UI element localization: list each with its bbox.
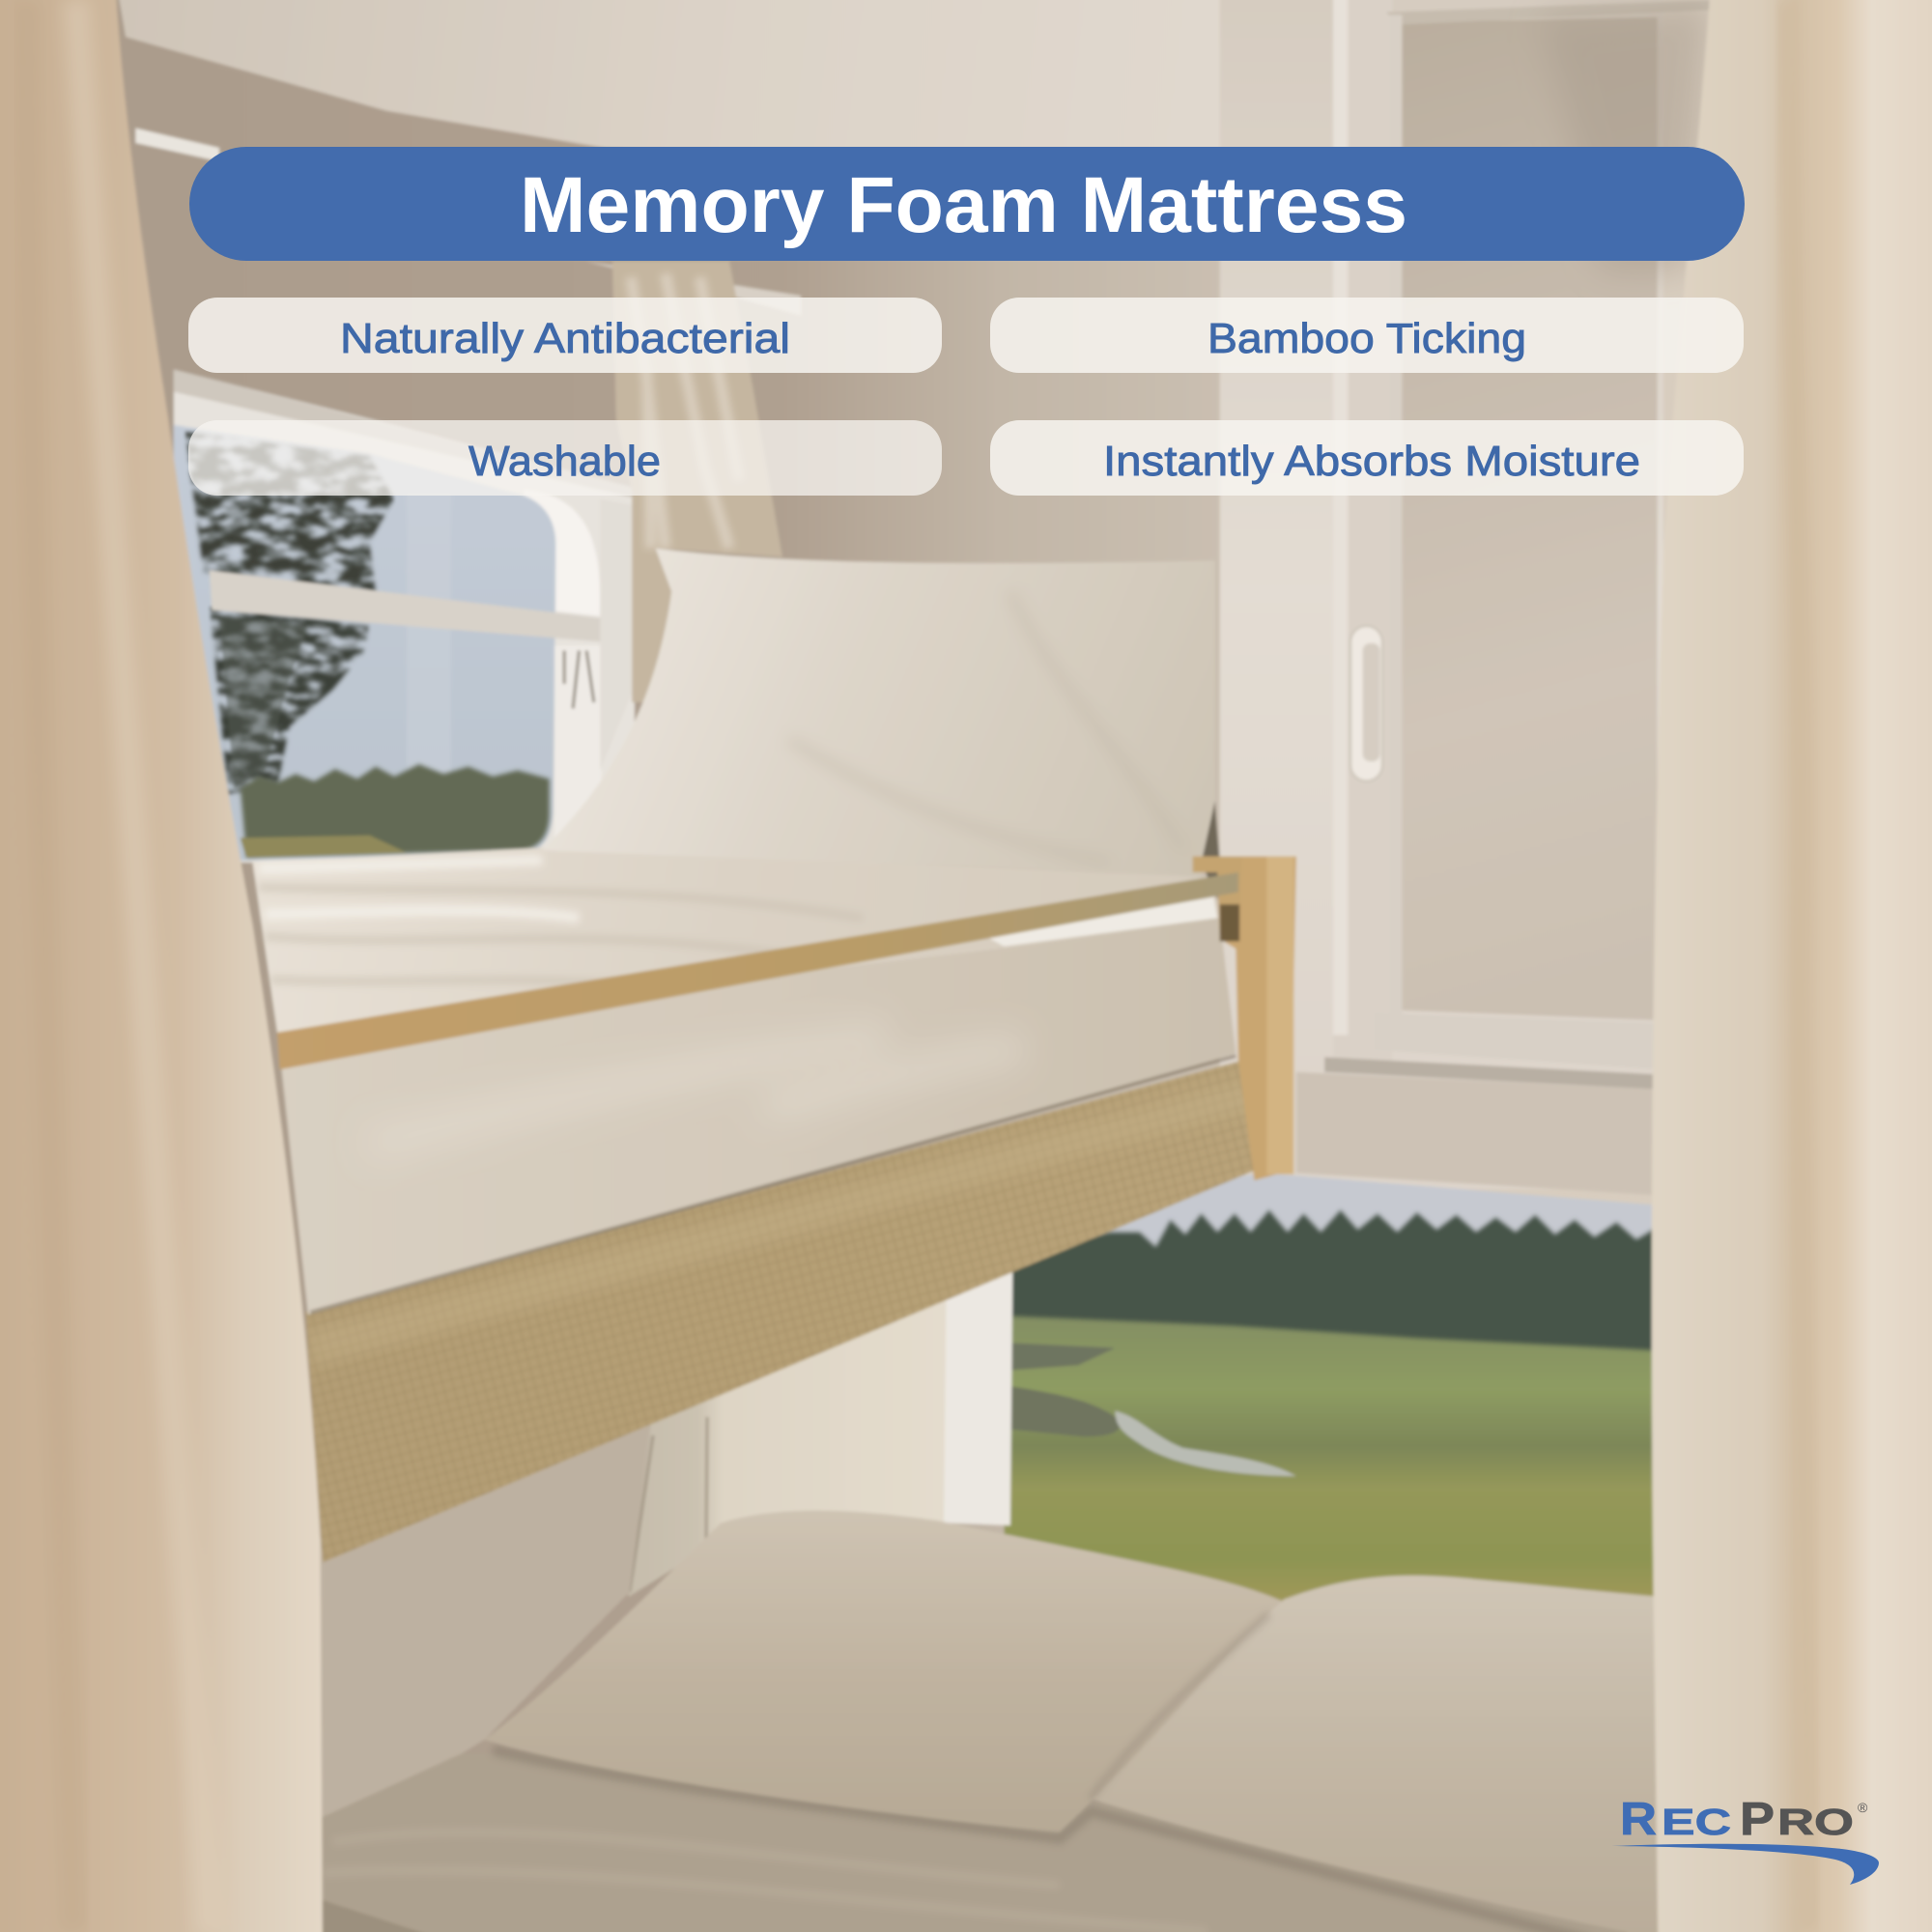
- feature pill: Instantly Absorbs Moisture: [990, 420, 1744, 496]
- window glass sky: [174, 425, 555, 863]
- upper pillow: [542, 549, 1215, 877]
- pillow wrinkles: [788, 591, 1182, 863]
- title text: Memory Foam Mattress: [520, 161, 1407, 249]
- ceiling: [111, 0, 1350, 185]
- logo: RecPro: R: [1620, 1794, 1657, 1845]
- lower pillow right: [1092, 1576, 1663, 1932]
- pond dark: [1010, 1386, 1120, 1436]
- bunk base burlap: [305, 1057, 1254, 1562]
- feature pill: Bamboo Ticking: Bamboo Ticking: [1208, 315, 1526, 362]
- logo: RecPro: ®: [1858, 1800, 1868, 1815]
- door lower edge: [1324, 1057, 1658, 1090]
- door handle: [1350, 626, 1382, 781]
- right curtain fold: [1784, 0, 1811, 1932]
- cabinet frame: [1333, 0, 1392, 1065]
- logo swoosh: [1611, 1844, 1879, 1885]
- burlap highlight: [308, 1078, 1254, 1368]
- closet cabinet: [1220, 0, 1713, 1195]
- frame highlight: [1333, 0, 1348, 1035]
- feature pill: Instantly Absorbs Moisture: Instantly Absorbs Moisture: [1103, 438, 1640, 485]
- sheet corner: [985, 897, 1217, 947]
- logo: RecPro: RO: [1777, 1803, 1854, 1843]
- curtain below bed: [629, 1282, 947, 1597]
- pond upper: [1010, 1343, 1115, 1370]
- title banner: [189, 147, 1745, 261]
- sky haze: [407, 493, 451, 844]
- landscape outside lower window: [863, 1173, 1658, 1609]
- pillow shadow on mattress: [493, 1749, 1589, 1932]
- cabinet lower plate: [1296, 1072, 1658, 1195]
- mattress bottom shadow: [310, 1056, 1236, 1312]
- curtain shadow: [27, 0, 74, 1932]
- feature pill: Washable: [188, 420, 942, 496]
- curtain fold: [76, 0, 210, 1932]
- window side post: [600, 499, 634, 770]
- door panel bevel: [1390, 14, 1403, 1019]
- window corner highlight: [524, 489, 601, 616]
- right curtain: [1652, 0, 1932, 1932]
- upper mattress top: [252, 848, 1220, 1033]
- mattress wrinkles: [323, 1833, 1208, 1932]
- window top sill shadow: [174, 370, 635, 497]
- pine trunk mass: [219, 616, 308, 788]
- notch shadow: [1220, 904, 1239, 941]
- rod end near curtain: [585, 261, 801, 316]
- upper mattress front: [277, 918, 1236, 1315]
- feature pill: Naturally Antibacterial: [188, 298, 942, 373]
- curtain at window: [612, 261, 782, 702]
- logo: RecPro: EC: [1662, 1803, 1731, 1843]
- window mid bar: [210, 571, 604, 642]
- curtain fold line: [630, 1417, 707, 1592]
- feature pill: Bamboo Ticking: [990, 298, 1744, 373]
- lower window post: [912, 1257, 1012, 1525]
- wooden bed rail: [277, 872, 1238, 1069]
- lower mattress: [308, 1753, 1663, 1932]
- lower pillow left: [484, 1511, 1284, 1833]
- pond reflection: [1115, 1410, 1296, 1476]
- feature pill: Naturally Antibacterial: Naturally Antibacterial: [340, 315, 790, 362]
- meadow: [1005, 1314, 1658, 1609]
- pine tree lower: [210, 607, 370, 795]
- door bottom rail: [1374, 1012, 1658, 1069]
- mattress highlights: [370, 1035, 1023, 1146]
- curtain rod: [135, 128, 219, 161]
- door panel: [1401, 17, 1658, 1020]
- forest: [1005, 1210, 1658, 1350]
- panel right-top shade: [1540, 0, 1713, 271]
- back wall: [0, 0, 1430, 1932]
- door top rail: [1386, 0, 1713, 25]
- curtain pleats: [631, 273, 739, 549]
- logo: RecPro: [1611, 1794, 1879, 1885]
- feature pill: Washable: Washable: [469, 438, 661, 485]
- left curtain: [0, 0, 323, 1932]
- sky: [863, 1173, 1658, 1355]
- logo: RecPro: P: [1740, 1794, 1775, 1845]
- window frame outer: [174, 370, 635, 863]
- cabinet left face: [1220, 0, 1663, 1189]
- pillow crease: [1091, 1614, 1269, 1799]
- window grass strip: [241, 836, 407, 858]
- sheet wrinkles: [259, 887, 863, 985]
- lower bunk gap: [314, 1897, 579, 1932]
- window treeline: [241, 764, 550, 858]
- lower wall: [314, 1417, 652, 1821]
- pillow shadow: [1202, 801, 1220, 899]
- wooden post: [1193, 856, 1296, 1180]
- pine tree reflection upper: [185, 431, 394, 591]
- sheet highlights: [259, 860, 579, 918]
- window latch: [554, 645, 601, 855]
